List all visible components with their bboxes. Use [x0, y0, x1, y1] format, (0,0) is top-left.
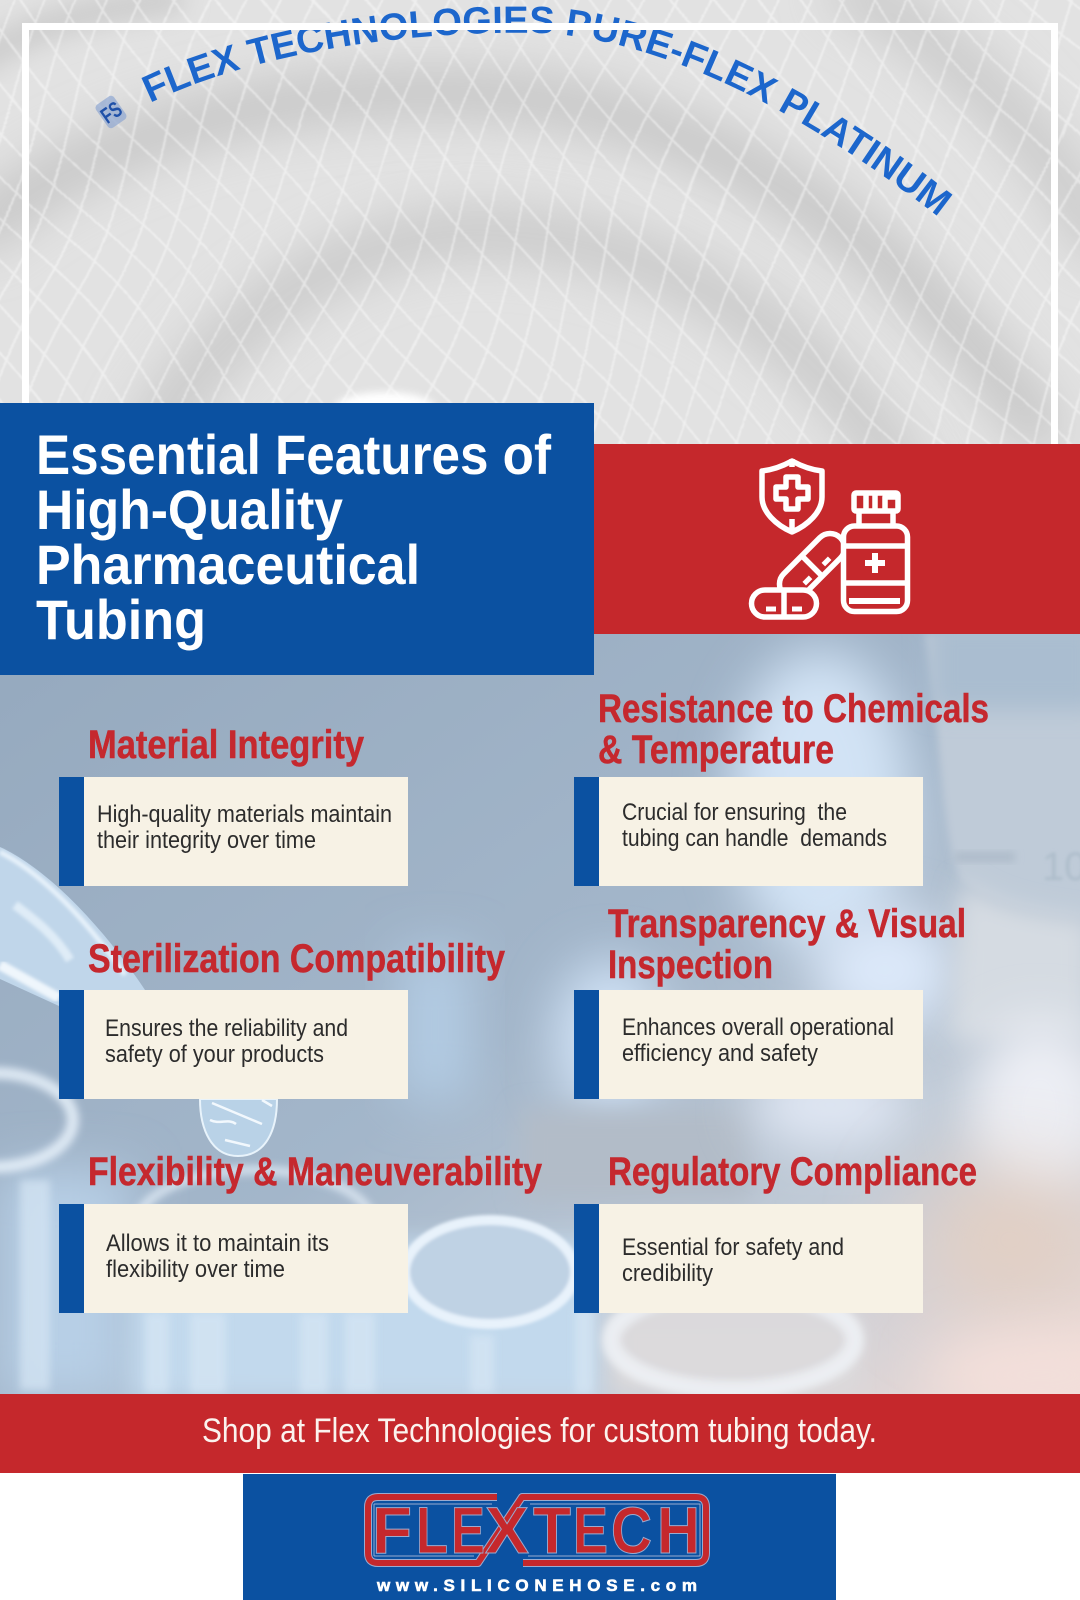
call to action banner — [0, 1394, 1080, 1473]
background photo: laboratory glassware — [0, 620, 1080, 1420]
body text — [97, 801, 392, 854]
logo: FLEXTECH: X — [485, 1493, 529, 1567]
body text: Enhances overall operational — [622, 1014, 894, 1041]
body text: High-quality materials maintain — [97, 801, 392, 828]
body text — [622, 799, 887, 852]
heading: Resistance to Chemicals — [598, 687, 989, 731]
panel: Regulatory Compliance — [574, 1150, 977, 1313]
icon: medicine bottle — [844, 493, 908, 612]
logo: FLEXTECH: F — [372, 1493, 412, 1567]
body text: flexibility over time — [106, 1256, 285, 1283]
logo: FLEXTECH: T — [533, 1493, 571, 1567]
call to action banner: Shop at Flex Technologies for custom tubing today. — [202, 1412, 877, 1450]
heading: Sterilization Compatibility — [88, 937, 506, 981]
website address: www.SILICONEHOSE.com — [376, 1576, 697, 1595]
logo: FLEXTECH: E — [451, 1493, 485, 1567]
logo: FLEXTECH — [368, 1493, 706, 1567]
panel: red icon banner — [594, 444, 1080, 634]
body text: safety of your products — [105, 1041, 324, 1068]
panel: Sterilization Compatibility — [59, 937, 506, 1099]
droplet — [200, 1099, 277, 1156]
heading: Regulatory Compliance — [608, 1150, 977, 1194]
panel: title: Essential Features of — [36, 423, 551, 486]
panel: Material Integrity — [59, 723, 408, 886]
icon: capsule, diagonal — [773, 527, 851, 605]
heading: Flexibility & Maneuverability — [88, 1150, 543, 1194]
logo: FLEXTECH: C — [611, 1493, 652, 1567]
logo: FLEXTECH: H — [657, 1493, 700, 1567]
icon: shield with cross — [762, 459, 822, 532]
panel: title: High-Quality — [36, 478, 343, 541]
body text: efficiency and safety — [622, 1040, 818, 1067]
body text: Ensures the reliability and — [105, 1015, 348, 1042]
panel: Flexibility & Maneuverability — [59, 1150, 543, 1313]
panel: Resistance to Chemicals & Temperature — [574, 687, 989, 886]
panel: title: Tubing — [36, 588, 206, 651]
panel: title — [0, 403, 594, 675]
body text: credibility — [622, 1260, 713, 1287]
body text — [105, 1015, 348, 1068]
white frame — [26, 26, 1054, 450]
heading: Material Integrity — [88, 723, 365, 767]
logo: FLEXTECH: E — [573, 1493, 608, 1567]
panel: footer logo — [243, 1474, 836, 1600]
heading: & Temperature — [598, 728, 834, 772]
background photo: braided silicone hose — [0, 0, 1080, 490]
heading: Transparency & Visual — [608, 902, 966, 946]
pipette — [0, 847, 145, 1006]
footer white strip — [0, 1473, 1080, 1600]
body text: Essential for safety and — [622, 1234, 844, 1261]
body text — [106, 1230, 329, 1283]
body text — [622, 1014, 894, 1067]
hose printed lettering: FLEX TECHNOLOGIES PURE-FLEX PLATINUM — [142, 6, 952, 216]
beakers — [0, 1073, 855, 1390]
body text: their integrity over time — [97, 827, 316, 854]
icon: shield, pills and medicine bottle — [752, 459, 908, 617]
heading — [598, 687, 989, 772]
icon: capsule, horizontal — [752, 590, 816, 617]
body text: Crucial for ensuring the — [622, 799, 847, 826]
logo: FLEXTECH: L — [416, 1493, 448, 1567]
body text: Allows it to maintain its — [106, 1230, 329, 1257]
panel: title: Pharmaceutical — [36, 533, 420, 596]
panel: Transparency & Visual Inspection — [574, 902, 966, 1099]
body text — [622, 1234, 844, 1287]
heading: Inspection — [608, 943, 773, 987]
icon: hose logo mark: FS — [96, 96, 127, 128]
body text: tubing can handle demands — [622, 825, 887, 852]
heading — [608, 902, 966, 987]
